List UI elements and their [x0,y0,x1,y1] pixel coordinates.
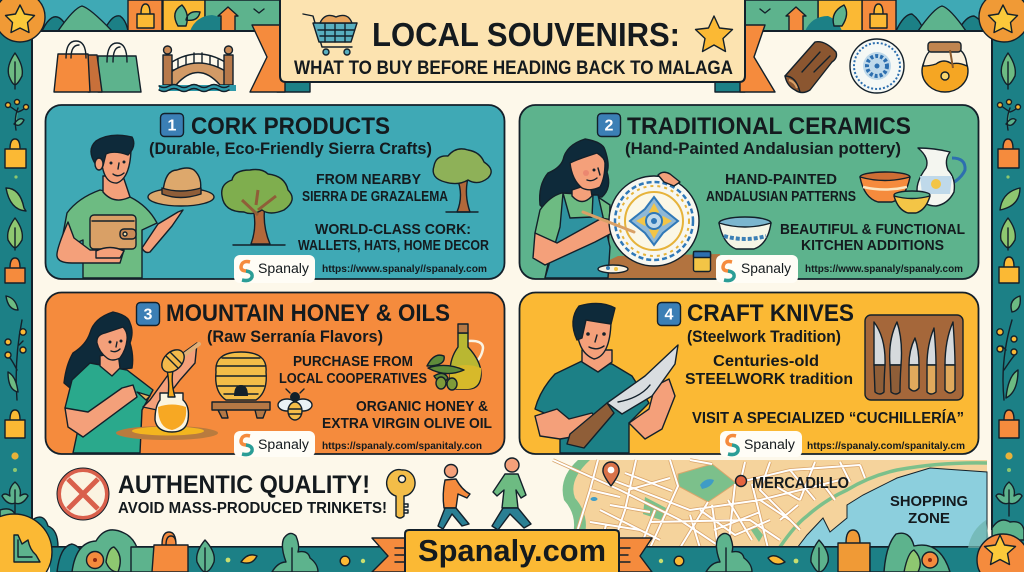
icon: honey jar [922,42,968,92]
text: patterns [706,172,856,205]
subheading: (Raw Serranía Flavors) [207,327,383,346]
number badge 4 [658,302,680,326]
title ribbons [250,25,775,92]
logo badge: Spanaly [741,261,791,276]
logo badge: Spanaly [258,261,309,276]
icon: bridge [159,46,236,92]
icon: shopping bags [54,41,141,92]
panel: craft knives [520,292,978,457]
icon: orange bowl [860,172,910,202]
title banner [280,0,745,82]
number badge 3 [136,302,160,326]
number badge 2: 2 [605,118,614,134]
icon: second tree [433,149,491,212]
icon: cork log [785,42,836,92]
text: origin [302,172,448,205]
icon: small yellow bowl [894,191,930,213]
illustration: man with cork goods [57,135,214,278]
map: shopping zone: SHOPPING [890,493,968,510]
callout: authentic quality [118,471,387,517]
icon: cork oak tree [222,170,292,245]
footer brand plate: Spanaly.com [418,533,606,568]
icon: palette [598,265,628,273]
panel: mountain honey and oils [46,292,504,457]
text: purchase [279,354,427,387]
text: function: KITCHEN ADDITIONS [801,237,944,254]
icon: shopping cart [303,14,357,55]
icon: key [387,470,415,518]
heading: CORK PRODUCTS [191,113,390,140]
right border band [991,0,1024,560]
text: products: WALLETS, HATS, HOME DECOR [298,237,489,254]
top border band [0,0,992,32]
map: shopping zone [553,460,987,548]
text: patterns: HAND-PAINTED [725,172,837,188]
heading: CRAFT KNIVES [687,300,854,327]
text: purchase: LOCAL COOPERATIVES [279,371,427,387]
text: function [780,221,965,254]
number badge 4: 4 [665,306,674,324]
text: organic [322,398,492,432]
url: https://www.spanaly/spanaly.com [805,263,963,275]
number badge 2 [598,114,620,136]
icon: painted plate [609,172,699,266]
logo badge: Spanaly [744,437,795,452]
text: function: BEAUTIFUL & FUNCTIONAL [780,221,965,238]
illustration: woman with honey [64,312,197,453]
icon: honey table and jar [116,366,218,440]
text: origin: FROM NEARBY [316,172,421,188]
url: https://spanaly.com/spanitaly.cm [807,440,965,452]
subheading: (Hand-Painted Andalusian pottery) [625,139,901,158]
url: https://www.spanaly//spanaly.com [322,263,487,275]
number badge 1: 1 [168,118,177,134]
left border band [0,0,58,560]
icon: ceramic plate [850,39,904,93]
text: patterns: ANDALUSIAN PATTERNS [706,189,856,205]
icon: blue white bowl [719,217,771,249]
icon: paint jar [694,252,710,272]
icon: prohibition sign [57,468,109,520]
callout: authentic quality: AUTHENTIC QUALITY! [118,471,370,499]
icon: star [696,16,732,52]
number badge 1 [160,114,184,136]
number badge 3: 3 [144,306,153,324]
map: shopping zone: MERCADILLO [752,475,849,492]
text: tradition [685,353,853,388]
text: purchase: PURCHASE FROM [293,354,413,370]
subtitle text: WHAT TO BUY BEFORE HEADING BACK TO MALAGA [294,58,733,79]
map: shopping zone: ZONE [908,510,950,527]
panel: traditional ceramics [520,105,978,283]
url: https://spanaly.com/spanitaly.con [322,440,482,452]
illustration: woman painting plate [533,139,612,278]
text: organic: EXTRA VIRGIN OLIVE OIL [322,415,492,432]
icon: beehive [212,352,270,418]
illustration: man with knife [535,303,675,453]
text: visit: VISIT A SPECIALIZED “CUCHILLERÍA” [692,410,964,427]
icon: walking people [438,458,531,530]
text: organic: ORGANIC HONEY & [356,398,488,415]
heading: TRADITIONAL CERAMICS [627,113,911,140]
subheading: (Steelwork Tradition) [687,327,841,346]
text: tradition: Centuries-old [713,353,819,370]
text: tradition: STEELWORK tradition [685,371,853,388]
logo badge [716,255,798,283]
table [572,254,720,278]
logo badge [234,255,315,283]
icon: jug [917,148,965,206]
icon: bee [278,389,312,420]
logo badge [720,431,802,457]
icon: knife set board [865,315,963,400]
text: origin: SIERRA DE GRAZALEMA [302,189,448,205]
logo badge: Spanaly [258,437,309,452]
icon: olive oil bottle [427,324,483,390]
icon: large knife [567,345,678,448]
panel: cork products [46,105,504,283]
logo badge [234,431,315,457]
text: products: WORLD-CLASS CORK: [315,221,471,238]
text: products [298,221,489,254]
cork wallet [90,215,136,249]
bottom border band [50,520,1000,572]
icon: honey dipper [157,344,199,377]
title text: LOCAL SOUVENIRS: [372,17,680,54]
cork hat [148,168,214,206]
footer ribbons [372,538,652,572]
icon: brush [583,212,634,232]
subheading: (Durable, Eco-Friendly Sierra Crafts) [149,139,432,158]
heading: MOUNTAIN HONEY & OILS [166,300,450,327]
callout: authentic quality: AVOID MASS-PRODUCED TRINKETS! [118,500,387,517]
